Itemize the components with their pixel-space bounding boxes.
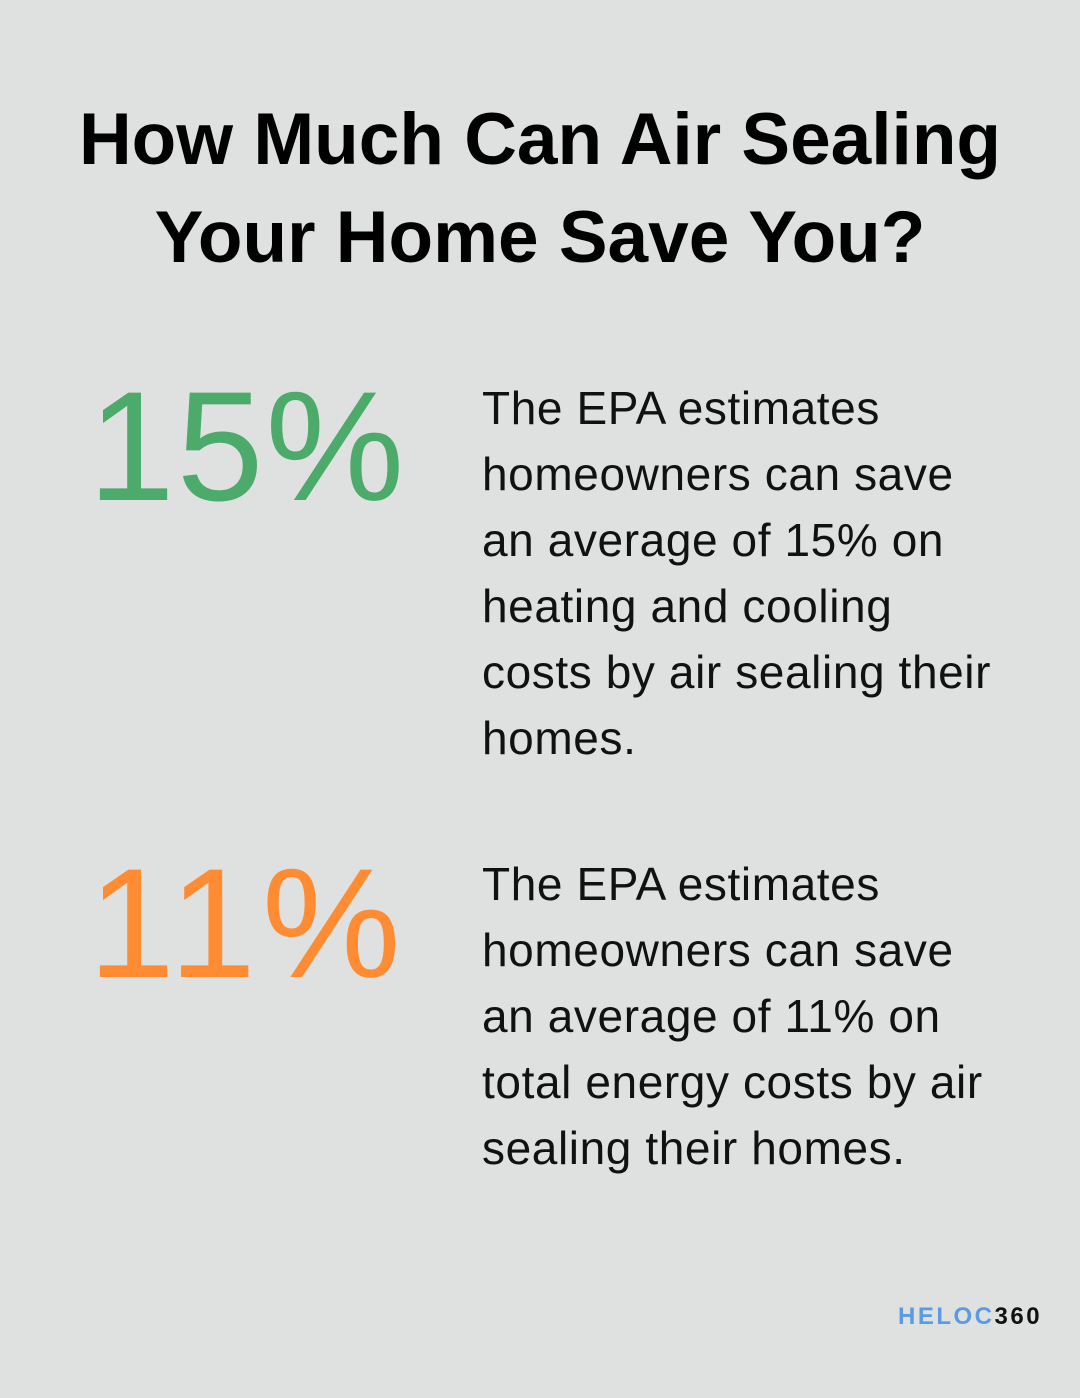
text: 15% description [482,382,991,764]
text: 15% description: homeowners can save [482,448,954,500]
title [79,99,1001,278]
text: 11% description: The EPA estimates [482,858,880,910]
stat: 11%: 11% [88,837,407,1011]
text: 11% description [482,858,983,1174]
text: 11% description: homeowners can save [482,924,954,976]
text: 11% description: sealing their homes. [482,1122,906,1174]
text: 11% description: an average of 11% on [482,990,941,1042]
logo: HELOC360 [898,1303,1042,1330]
text: 15% description: heating and cooling [482,580,892,632]
text: 15% description: an average of 15% on [482,514,944,566]
title: Your Home Save You? [155,197,925,278]
text: 15% description: costs by air sealing their [482,646,991,698]
title: How Much Can Air Sealing [79,99,1001,180]
text: 15% description: The EPA estimates [482,382,880,434]
text: 15% description: homes. [482,712,636,764]
text: 11% description: total energy costs by air [482,1056,983,1108]
stat: 15%: 15% [88,360,406,534]
